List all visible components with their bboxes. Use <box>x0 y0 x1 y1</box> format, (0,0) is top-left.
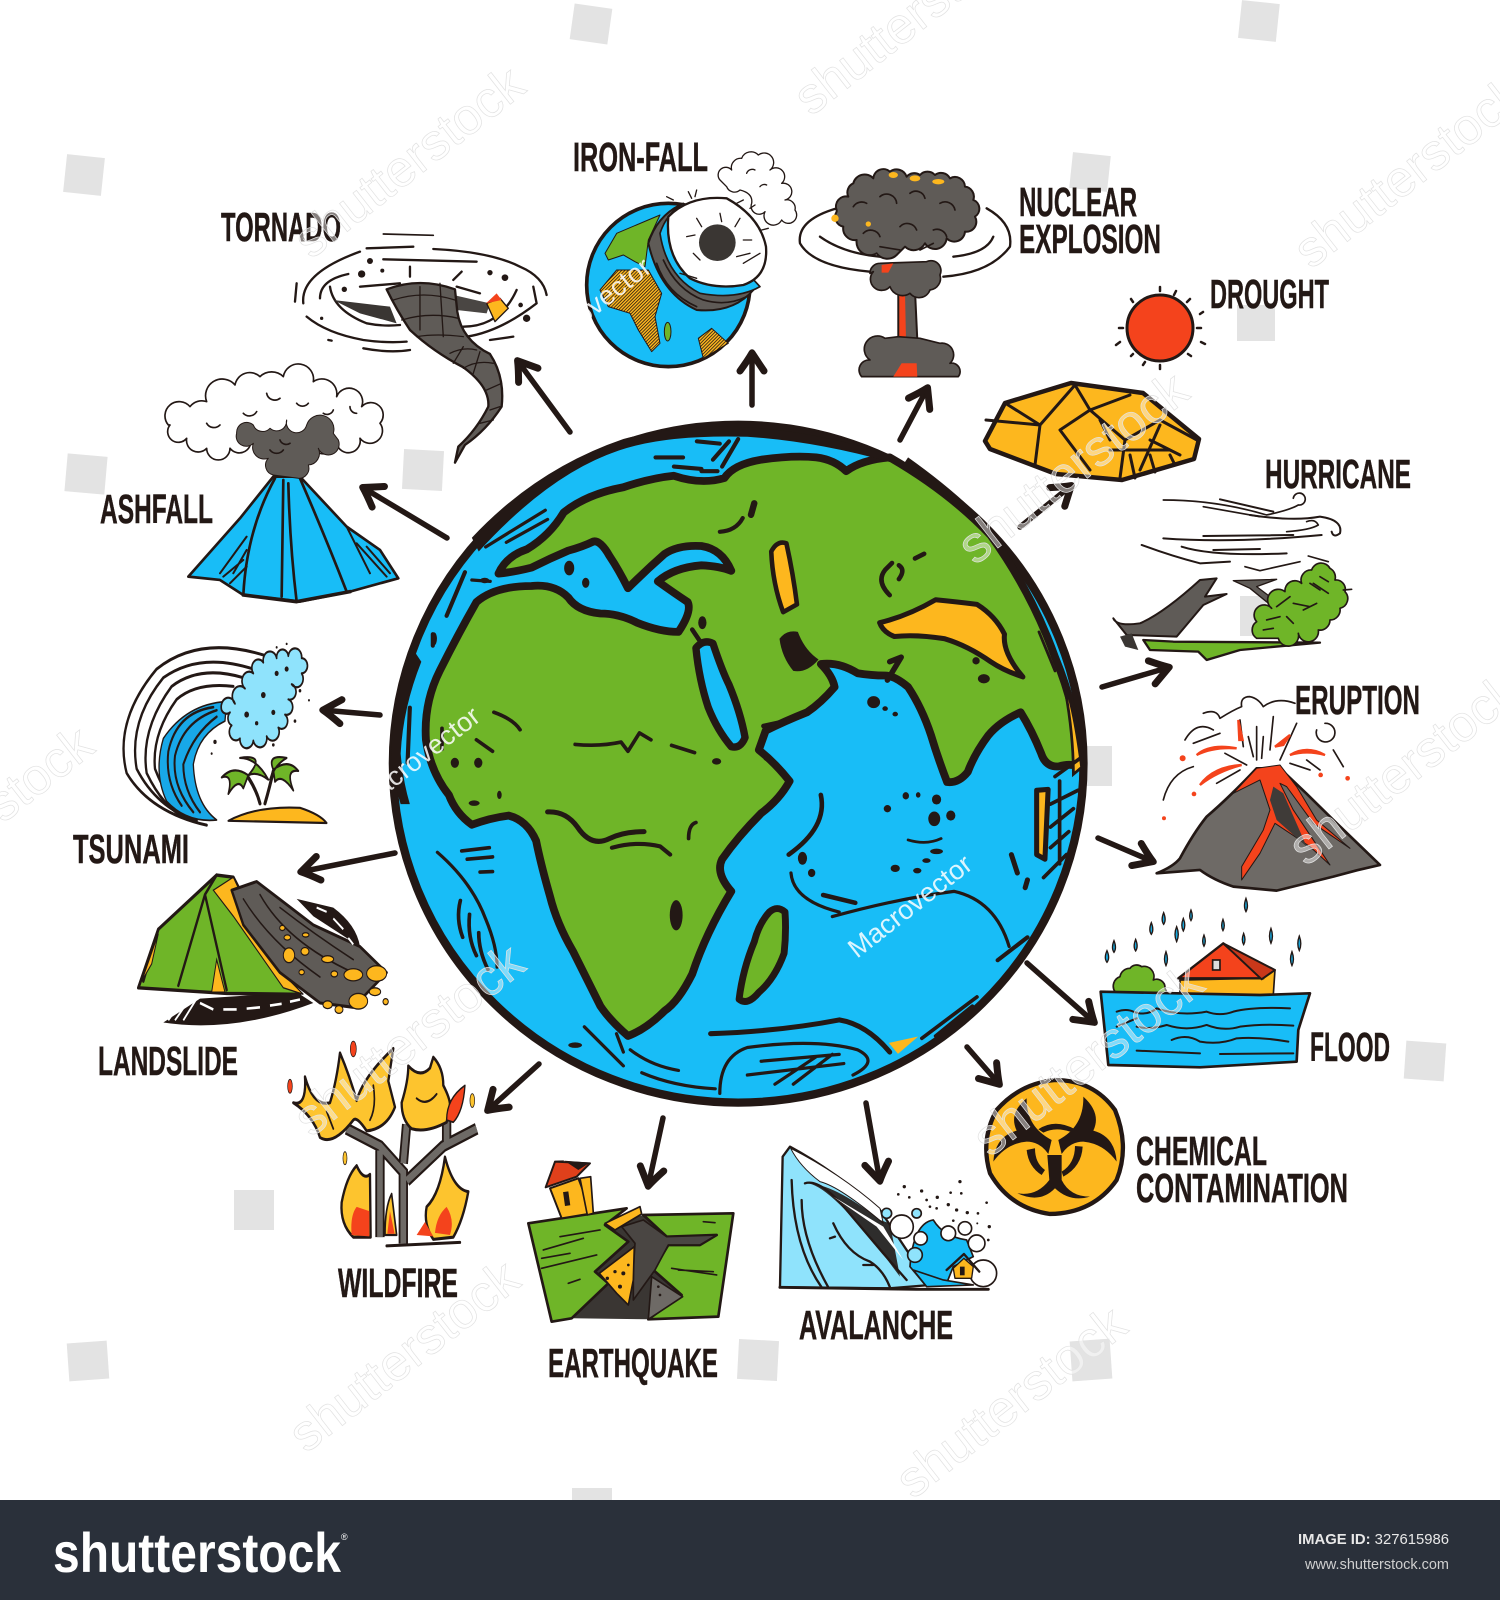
label: wildfire: WILDFIRE <box>338 1260 458 1306</box>
Red Sea <box>696 642 745 747</box>
watermark text overlays: shutterstock <box>283 932 535 1147</box>
globe <box>391 425 1083 1103</box>
watermark text overlays: shutterstock <box>885 1294 1137 1509</box>
site url: www.shutterstock.com <box>1304 1556 1449 1573</box>
watermark text overlays: shutterstock <box>283 54 535 269</box>
label: avalanche: AVALANCHE <box>799 1302 953 1348</box>
icon: flood <box>1101 898 1310 1067</box>
icon: drought sun and cracked ground <box>985 287 1205 480</box>
label: nuclear explosion: EXPLOSION <box>1019 216 1161 262</box>
icon: iron-fall <box>587 152 797 367</box>
watermark text overlays: shutterstock <box>962 952 1214 1167</box>
label: drought: DROUGHT <box>1210 271 1329 317</box>
footer bar <box>0 1500 1500 1600</box>
label: flood: FLOOD <box>1310 1024 1390 1070</box>
label: tsunami: TSUNAMI <box>73 826 189 872</box>
ink details <box>780 631 819 671</box>
label: chemical contamination: CONTAMINATION <box>1136 1165 1348 1211</box>
icon: tsunami <box>124 643 327 825</box>
arrows radiating from globe <box>300 352 1170 1187</box>
label: chemical contamination: CHEMICAL <box>1136 1128 1267 1174</box>
icon: ashfall volcano <box>165 364 398 602</box>
watermark text overlays: Macrovector <box>350 701 486 816</box>
land masses: Eurasia and Africa <box>426 457 1080 1036</box>
icon: nuclear explosion <box>800 169 1010 377</box>
Madagascar <box>739 909 786 1002</box>
label: landslide: LANDSLIDE <box>98 1038 238 1084</box>
icon: eruption volcano <box>1157 697 1380 891</box>
icon: wildfire <box>288 1041 477 1246</box>
logo wordmark: shutterstock <box>53 1521 342 1584</box>
icon: hurricane <box>1113 493 1352 660</box>
icon: landslide <box>138 875 388 1025</box>
icon: tornado <box>295 234 547 463</box>
label: ashfall: ASHFALL <box>100 486 213 532</box>
watermark text overlays: Macrovector <box>521 252 657 367</box>
icon: avalanche <box>780 1147 997 1289</box>
watermark text overlays: shutterstock <box>947 360 1199 575</box>
label: tornado: TORNADO <box>221 204 341 250</box>
registered mark: ® <box>341 1532 348 1542</box>
icon: biohazard circle <box>986 1080 1123 1214</box>
label: earthquake: EARTHQUAKE <box>548 1340 718 1386</box>
icon: earthquake <box>528 1160 733 1322</box>
watermark text overlays: shutterstock <box>278 1248 530 1463</box>
ocean disc <box>393 425 1083 1103</box>
image id: IMAGE ID: 327615986 <box>1298 1531 1449 1548</box>
label: nuclear explosion: NUCLEAR <box>1019 179 1137 225</box>
icon: sun <box>1127 295 1193 361</box>
label: iron-fall: IRON-FALL <box>573 134 708 180</box>
cracked ground <box>985 383 1199 480</box>
watermark text overlays: Macrovector <box>842 849 978 964</box>
deserts <box>771 543 797 612</box>
